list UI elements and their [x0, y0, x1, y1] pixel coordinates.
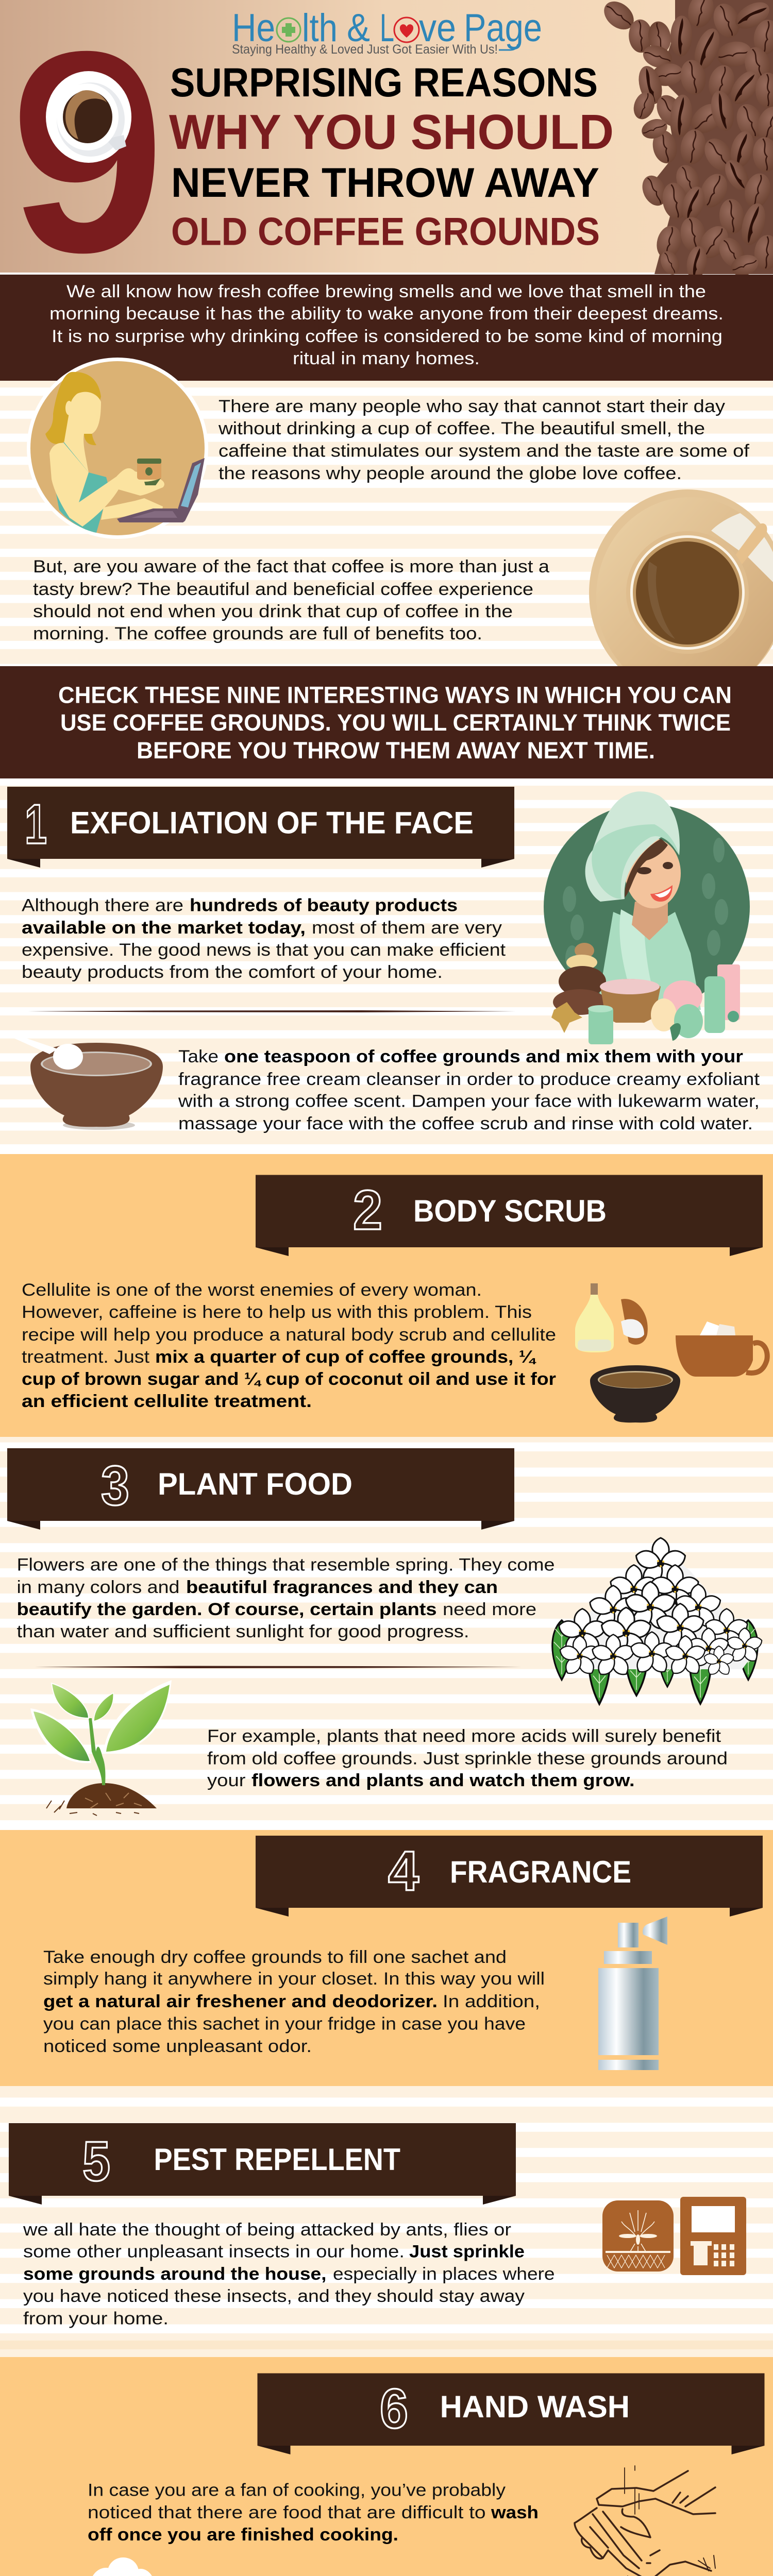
text block: [207, 1726, 728, 1790]
banner heading: [256, 1836, 763, 1917]
text block: treatment. Just: [22, 1347, 150, 1367]
text block: [16, 1555, 554, 1641]
logo: [232, 6, 542, 57]
text block: from old coffee grounds. Just sprinkle these grounds around: [207, 1749, 728, 1768]
text block: without drinking a cup of coffee. The beautiful smell, the: [218, 419, 705, 438]
text block: some grounds around the house,: [23, 2264, 327, 2284]
text block: get a natural air freshener and deodorizer.: [43, 1992, 438, 2011]
text block: Just sprinkle: [409, 2242, 525, 2262]
text block: [88, 2480, 539, 2545]
text block: hundreds of beauty products: [190, 896, 458, 916]
text block: recipe will help you produce a natural body scrub and cellulite: [22, 1325, 556, 1345]
text block: need more: [443, 1600, 536, 1619]
text block: flowers and plants and watch them grow.: [251, 1771, 635, 1790]
illustration: seedling in soil: [30, 1680, 172, 1816]
text block: beauty products from the comfort of your home.: [22, 962, 443, 982]
text block: beautify the garden. Of course, certain plants: [16, 1600, 437, 1619]
text block: we all hate the thought of being attacked by ants, flies or: [23, 2220, 511, 2240]
illustration: white flowers with green leaves: [552, 1538, 764, 1704]
banner heading: [9, 2123, 516, 2205]
big number 9: 9: [10, 0, 165, 312]
logo: He: [232, 6, 275, 50]
icon: mosquito trap: [602, 2200, 674, 2272]
text block: one teaspoon of coffee grounds and mix them with your: [224, 1047, 743, 1066]
text block: expensive. The good news is that you can make efficient: [22, 940, 506, 960]
text block: simply hang it anywhere in your closet. In this way you will: [43, 1969, 545, 1989]
banner heading: FRAGRANCE: [450, 1855, 631, 1889]
banner heading: EXFOLIATION OF THE FACE: [70, 806, 474, 840]
logo: L: [380, 6, 394, 50]
text block: [218, 397, 750, 483]
icon: air freshener spray can: [598, 1917, 667, 2070]
banner heading: 1: [25, 793, 47, 856]
icon: repellent device: [680, 2197, 746, 2275]
text block: than water and sufficient sunlight for good progress.: [16, 1622, 469, 1641]
banner heading: [258, 2373, 765, 2454]
panel: nine ways callout: USE COFFEE GROUNDS. YOU WILL CERTAINLY THINK TWICE: [60, 709, 731, 736]
text block: wash: [491, 2503, 539, 2522]
logo: ve: [419, 6, 456, 50]
text block: caffeine that stimulates our system and the taste are some of: [219, 441, 750, 461]
banner heading: 2: [353, 1179, 382, 1242]
text block: fragrance free cream cleanser in order to produce creamy exfoliant: [178, 1070, 760, 1089]
text block: should not end when you drink that cup of coffee in the: [33, 602, 513, 621]
text block: Take enough dry coffee grounds to fill one sachet and: [43, 1947, 507, 1967]
text block: Although there are: [22, 896, 183, 916]
text block: There are many people who say that cannot start their day: [219, 397, 725, 416]
text block: Cellulite is one of the worst enemies of every woman.: [22, 1280, 482, 1300]
panel: intro band: It is no surprise why drinking coffee is considered to be some kind of morning: [52, 327, 722, 346]
text block: most of them are very: [312, 918, 502, 938]
text block: [22, 1280, 556, 1411]
icon: coffee cup from above: [46, 71, 131, 163]
text block: you have noticed these insects, and they should stay away: [23, 2286, 525, 2306]
panel: 6 hand wash: [0, 2357, 773, 2576]
panel: nine ways callout: CHECK THESE NINE INTERESTING WAYS IN WHICH YOU CAN: [58, 682, 732, 708]
text block: [178, 1047, 760, 1133]
logo: Staying Healthy & Loved Just Got Easier With Us!: [232, 42, 498, 57]
text block: In addition,: [443, 1992, 540, 2011]
title: NEVER THROW AWAY: [171, 160, 599, 206]
text block: But, are you aware of the fact that coffee is more than just a: [33, 557, 549, 577]
banner heading: PLANT FOOD: [158, 1467, 352, 1501]
text block: morning. The coffee grounds are full of benefits too.: [33, 624, 482, 643]
text block: with a strong coffee scent. Dampen your face with lukewarm water,: [178, 1092, 760, 1111]
illustration: washing hands line drawing: [575, 2466, 715, 2576]
text block: massage your face with the coffee scrub and rinse with cold water.: [178, 1114, 753, 1133]
text block: [23, 2220, 554, 2328]
text block: from your home.: [23, 2309, 169, 2328]
text block: Flowers are one of the things that resemble spring. They come: [16, 1555, 554, 1575]
title: [169, 59, 614, 253]
text block: In case you are a fan of cooking, you’ve probably: [88, 2480, 506, 2500]
panel: 3 plant food: [0, 1437, 773, 1830]
text block: especially in places where: [333, 2264, 554, 2284]
banner heading: HAND WASH: [440, 2389, 630, 2424]
banner heading: 6: [380, 2378, 408, 2441]
coffee beans: [599, 0, 773, 281]
banner heading: [7, 1448, 514, 1530]
text block: available on the market today,: [22, 918, 306, 938]
logo: &: [347, 6, 370, 50]
title: SURPRISING REASONS: [170, 59, 598, 105]
text block: mix a quarter of cup of coffee grounds, ¼: [155, 1347, 536, 1367]
panel: 2 body scrub: [0, 1154, 773, 1437]
illustration: chef rolling dough: [22, 2557, 233, 2576]
text block: For example, plants that need more acids will surely benefit: [207, 1726, 721, 1746]
logo: Page: [464, 6, 542, 50]
text block: noticed some unpleasant odor.: [43, 2037, 312, 2056]
icon: black bowl with coffee grounds: [590, 1365, 680, 1422]
banner heading: PEST REPELLENT: [154, 2142, 400, 2177]
text block: [33, 557, 549, 643]
banner heading: 4: [388, 1840, 419, 1903]
illustration: large coffee cup: [589, 489, 773, 666]
panel: header: [0, 0, 773, 312]
panel: nine ways callout: [0, 666, 773, 778]
panel: 1 exfoliation of the face: [0, 786, 773, 1144]
text block: However, caffeine is here to help us with this problem. This: [22, 1302, 532, 1322]
panel: intro band: We all know how fresh coffee brewing smells and we love that smell in the: [66, 282, 706, 301]
illustration: woman with coffee and laptop: [27, 358, 208, 539]
text block: [43, 1947, 545, 2056]
icon: mug with sugar cubes: [676, 1321, 767, 1377]
text block: cup of brown sugar and ¼ cup of coconut oil and use it for: [22, 1369, 556, 1389]
text block: tasty brew? The beautiful and beneficial coffee experience: [33, 580, 533, 599]
banner heading: [256, 1175, 763, 1256]
title: OLD COFFEE GROUNDS: [171, 210, 600, 253]
panel: intro band: ritual in many homes.: [293, 349, 480, 368]
text block: in many colors and: [16, 1578, 179, 1597]
illustration: woman in towel with spa items: [544, 791, 750, 1044]
panel: 4 fragrance: [0, 1830, 773, 2086]
text block: beautiful fragrances and they can: [186, 1578, 498, 1597]
panel: coffee love intro: [0, 358, 773, 697]
panel: nine ways callout: BEFORE YOU THROW THEM AWAY NEXT TIME.: [137, 737, 655, 764]
logo: lth: [302, 6, 338, 50]
text block: the reasons why people around the globe love coffee.: [219, 464, 682, 483]
banner heading: 5: [82, 2130, 110, 2193]
text block: [22, 896, 506, 982]
text block: noticed that there are food that are difficult to: [88, 2503, 486, 2522]
banner heading: BODY SCRUB: [413, 1194, 607, 1228]
title: WHY YOU SHOULD: [169, 105, 614, 160]
text block: an efficient cellulite treatment.: [22, 1392, 312, 1411]
text block: your: [207, 1771, 245, 1790]
icon: coconut oil bottle and coconut: [575, 1283, 648, 1352]
panel: intro band: morning because it has the ability to wake anyone from their deepest dreams.: [49, 304, 724, 324]
text block: off once you are finished cooking.: [88, 2525, 398, 2545]
text block: you can place this sachet in your fridge in case you have: [43, 2014, 526, 2034]
text block: some other unpleasant insects in our home.: [23, 2242, 405, 2262]
panel: 5 pest repellent: [0, 2086, 773, 2357]
icon: brown scrub bowl with spoon: [10, 1033, 163, 1130]
banner heading: [7, 787, 514, 868]
panel: intro band: [0, 275, 773, 381]
text block: Take: [178, 1047, 219, 1066]
banner heading: 3: [101, 1454, 129, 1517]
